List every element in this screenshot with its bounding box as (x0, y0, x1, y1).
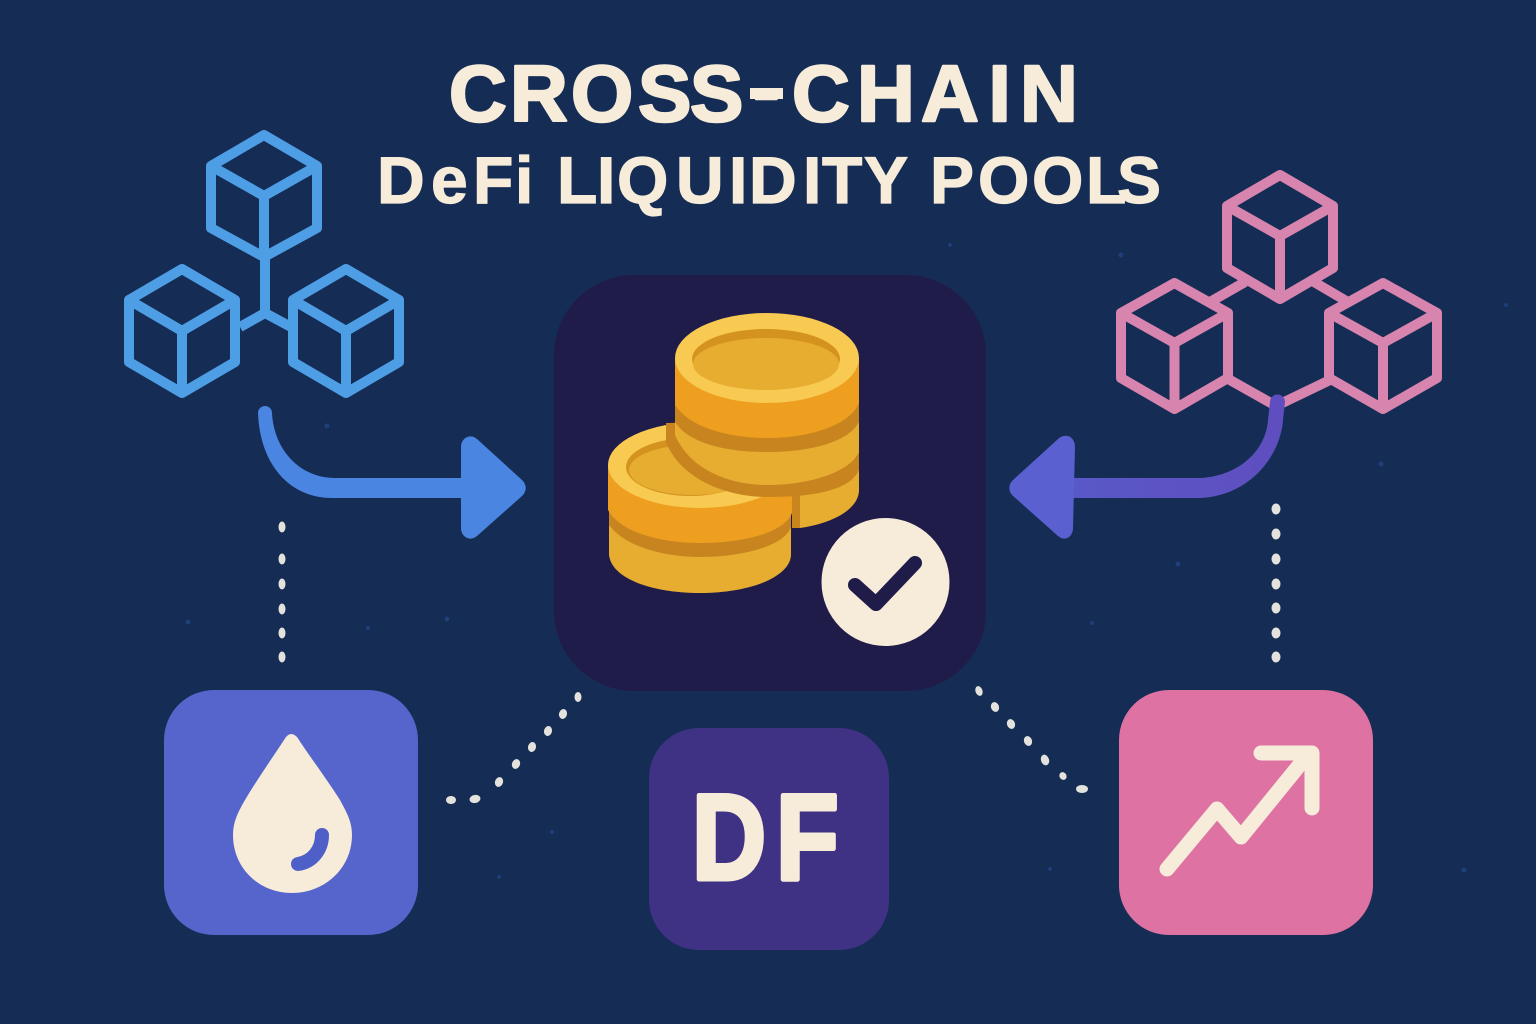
panel: growth chart (1119, 690, 1373, 935)
icon: rising arrow (1167, 753, 1312, 869)
DF label: DF (692, 769, 839, 905)
panel: liquidity drop (164, 690, 418, 935)
arrow: purple to center (1009, 395, 1285, 539)
icon: gold coin stack (608, 313, 859, 593)
panel: central liquidity pool (554, 275, 986, 691)
arrow: blue to center (258, 406, 526, 539)
title: CROSS-CHAIN (449, 43, 1078, 138)
title: DeFi LIQUIDITY POOLS (377, 143, 1161, 217)
dotted connector: center to drop (446, 692, 582, 804)
panel: DF badge (649, 728, 889, 950)
dotted connector: right vertical (1272, 504, 1280, 662)
icon: water drop (233, 734, 352, 893)
title (377, 43, 1161, 217)
dotted connector: left vertical (278, 522, 286, 662)
icon: checkmark badge (822, 518, 950, 646)
dotted connector: center to growth (974, 685, 1088, 793)
icon: blue blockchain cubes (129, 135, 399, 393)
icon: pink blockchain cubes (1121, 175, 1437, 409)
